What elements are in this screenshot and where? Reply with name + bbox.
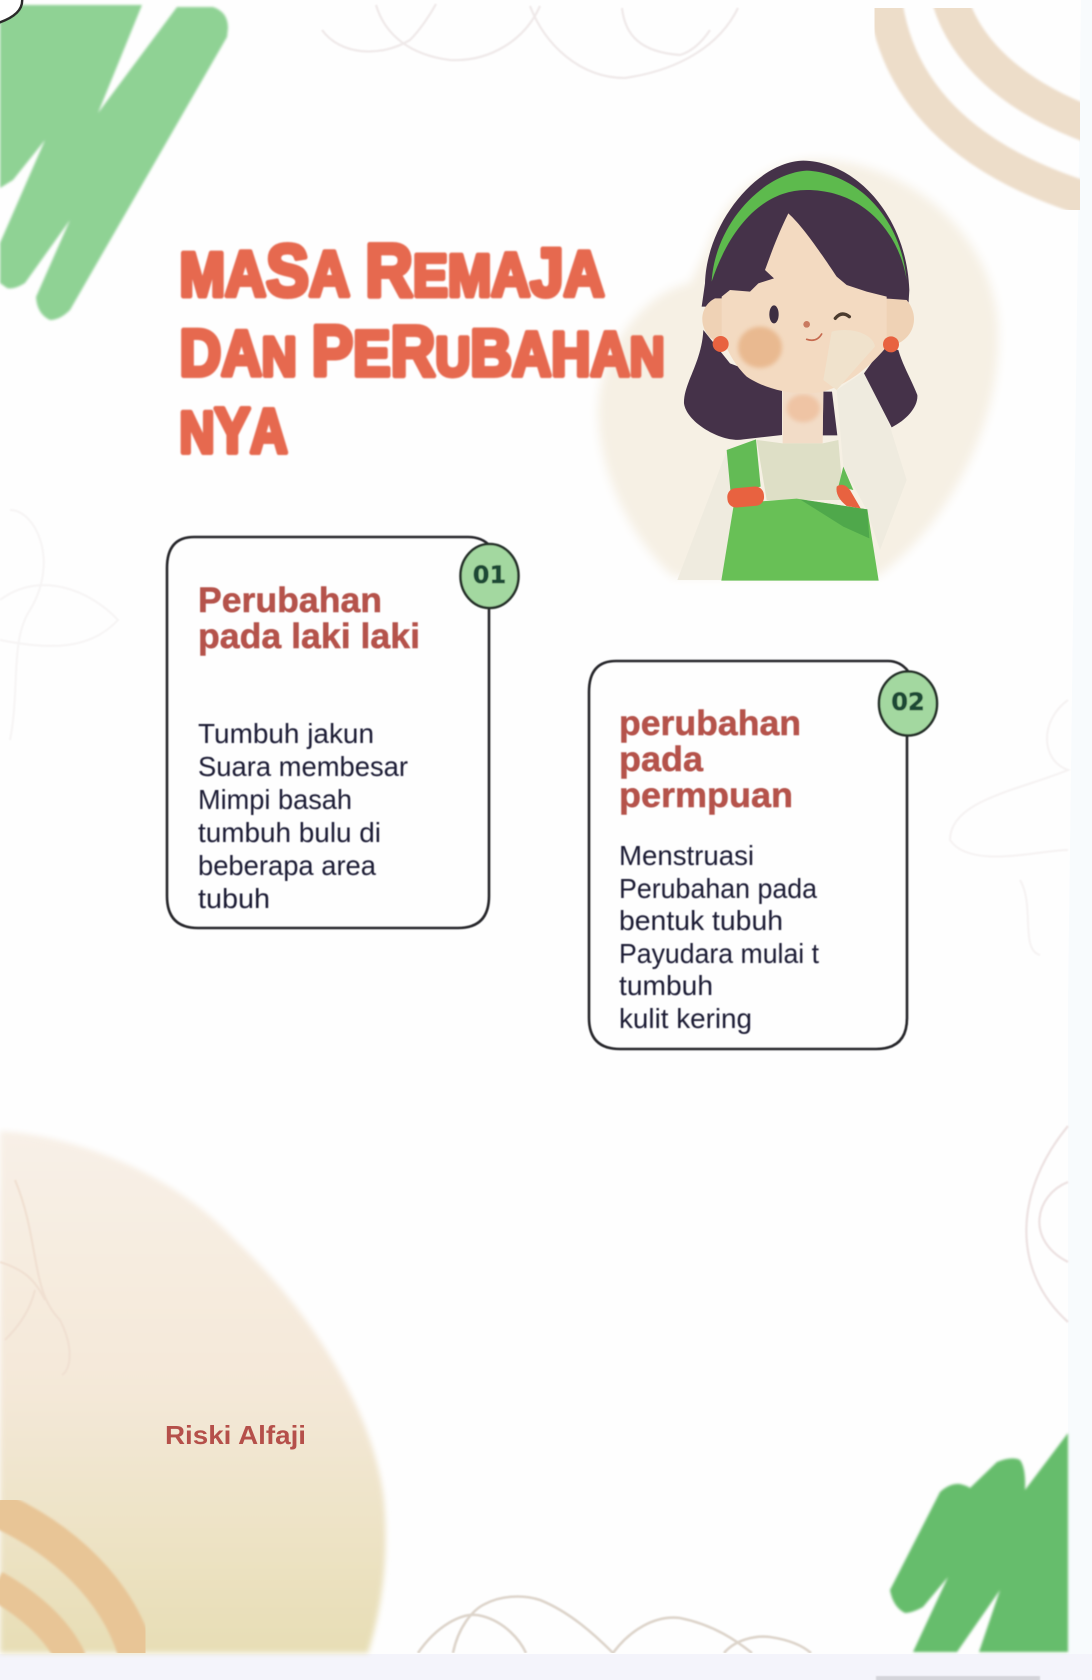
decoration: bottom-right green scribble — [890, 1433, 1068, 1652]
text: list of changes in girls: Menstruasi — [619, 840, 754, 871]
overall skirt — [721, 499, 879, 581]
decoration: top-right beige arcs — [885, 0, 1090, 200]
text: list of changes in girls: tumbuh — [619, 970, 713, 1001]
decoration: left leaf doodle — [0, 510, 118, 740]
text: list of changes in boys: tubuh — [198, 883, 270, 914]
author name: Riski Alfaji — [165, 1420, 306, 1450]
text: list of changes in boys: Tumbuh jakun — [198, 718, 374, 749]
heading: changes in girls — [619, 704, 801, 815]
decoration: bottom-left orange arcs — [0, 1508, 138, 1660]
buttons — [727, 486, 765, 508]
heading: changes in boys: Perubahan — [198, 581, 382, 620]
headband — [712, 171, 907, 282]
title: DAN PERUBAHAN — [180, 312, 664, 392]
decoration: bottom-left beige blob — [0, 1131, 386, 1653]
earrings — [713, 336, 729, 352]
heading: changes in boys: pada laki laki — [198, 617, 420, 656]
neck shadow — [787, 394, 820, 422]
corner mark — [0, 0, 22, 23]
heading: changes in girls: permpuan — [619, 776, 793, 815]
illustration: girl with green headband — [598, 160, 998, 581]
left blush — [738, 327, 782, 368]
eye — [769, 305, 779, 323]
decoration: top doodle — [322, 4, 738, 78]
decoration: bottom-left leaf doodle — [0, 1180, 70, 1375]
shirt — [757, 440, 843, 500]
text: list of changes in boys: beberapa area — [198, 850, 376, 881]
title: MASA REMAJA — [180, 228, 604, 312]
text: list of changes in girls: bentuk tubuh — [619, 905, 783, 936]
neck — [783, 390, 823, 443]
text: list of changes in boys: Suara membesar — [198, 751, 408, 782]
heading: changes in boys — [198, 581, 420, 656]
mouth — [807, 334, 822, 340]
hair — [684, 161, 917, 440]
overall straps — [727, 439, 853, 493]
nose — [803, 321, 810, 328]
badge 02: 02 — [891, 688, 925, 716]
face — [722, 213, 887, 393]
sleeves — [677, 370, 907, 580]
ears — [702, 298, 914, 347]
decoration: bottom doodle — [418, 1597, 811, 1653]
text: list of changes in girls: kulit kering — [619, 1003, 752, 1034]
text: list of changes in boys: tumbuh bulu di — [198, 817, 381, 848]
decoration: right arc doodle — [1026, 1126, 1068, 1322]
hand on cheek — [823, 330, 875, 390]
footer smudge — [876, 1676, 1040, 1680]
text: list of changes in girls: Perubahan pada — [619, 873, 817, 904]
wink — [835, 314, 849, 318]
heading: changes in girls: pada — [619, 740, 704, 779]
skirt shadow — [800, 499, 869, 538]
badge 01: 01 — [473, 561, 506, 589]
text: list of changes in boys — [198, 718, 408, 914]
badge 02 — [879, 672, 937, 736]
decoration: top-left green scribble — [0, 5, 228, 320]
title — [180, 228, 664, 466]
text: list of changes in girls: Payudara mulai t — [619, 938, 819, 969]
panel: card 02 changes in girls — [589, 661, 937, 1049]
backdrop blob — [598, 160, 998, 577]
panel: card 01 changes in boys — [167, 537, 518, 928]
text: list of changes in boys: Mimpi basah — [198, 784, 352, 815]
decoration: right doodle — [950, 700, 1068, 955]
badge 01 — [460, 544, 518, 608]
figure — [677, 161, 917, 581]
text: list of changes in girls — [619, 840, 819, 1034]
heading: changes in girls: perubahan — [619, 704, 801, 743]
title: NYA — [180, 394, 288, 466]
